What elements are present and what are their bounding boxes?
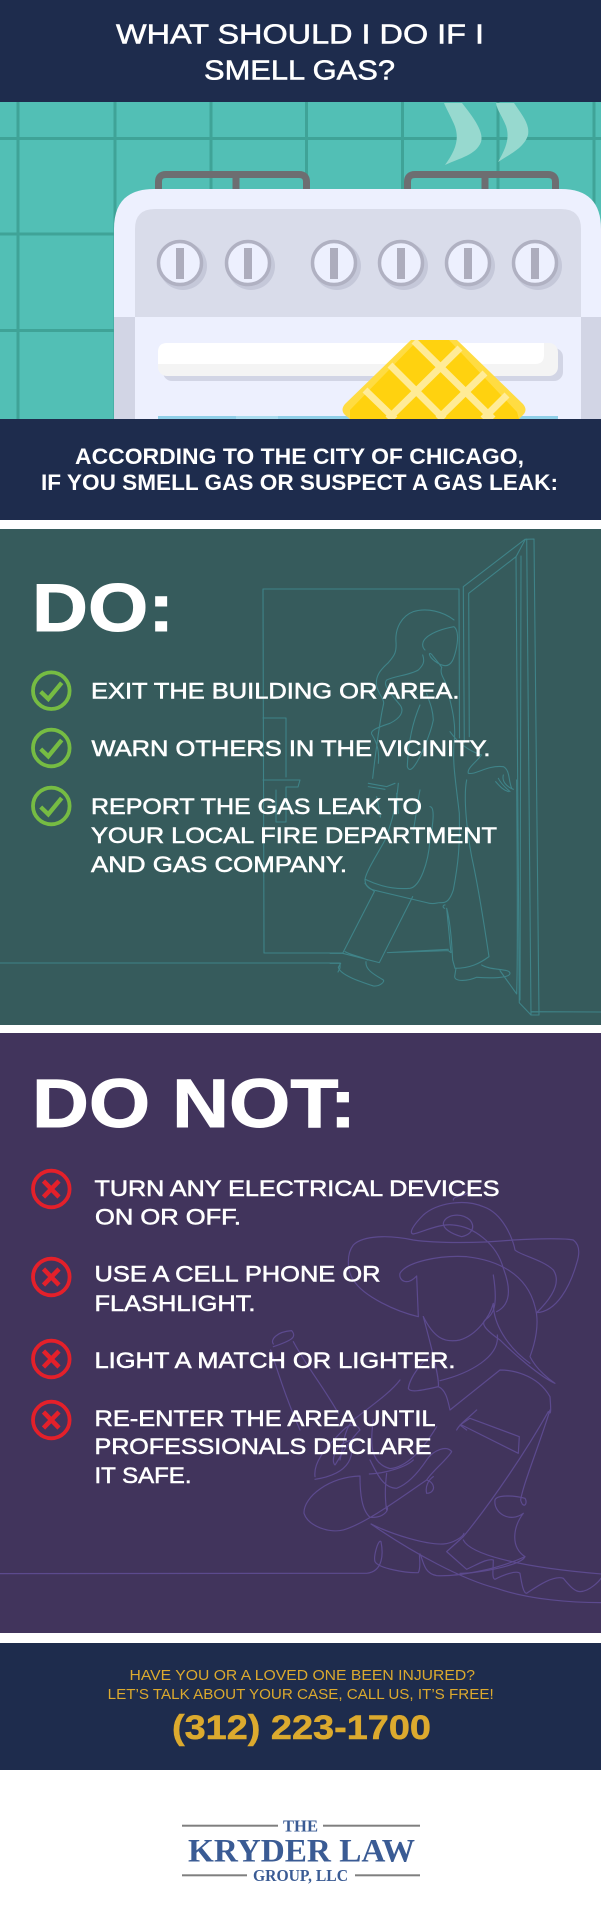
logo: the kryder law group: GROUP, LLC — [253, 1866, 348, 1885]
logo: the kryder law group — [182, 1817, 420, 1885]
item: report the gas leak — [33, 788, 497, 877]
panel: call to action — [0, 1643, 601, 1770]
item: warn others — [33, 730, 490, 766]
call to action text: LET’S TALK ABOUT YOUR CASE, CALL US, IT’S FREE! — [108, 1686, 494, 1703]
item: exit the building — [33, 672, 460, 709]
line art: woman leaving through door — [0, 539, 601, 1015]
icon: x — [33, 1259, 70, 1295]
item: electrical devices: ON OR OFF. — [95, 1204, 241, 1230]
panel: title header — [0, 0, 601, 102]
icon: x — [33, 1171, 70, 1207]
icon: check — [33, 672, 70, 709]
item: report the gas leak: REPORT THE GAS LEAK TO — [91, 794, 422, 819]
item: warn others: WARN OTHERS IN THE VICINITY. — [92, 736, 490, 761]
logo: the kryder law group: KRYDER LAW — [188, 1834, 415, 1870]
item: re-enter: PROFESSIONALS DECLARE — [94, 1434, 431, 1459]
item: electrical devices — [33, 1171, 500, 1230]
panel: do — [0, 529, 601, 1025]
item: report the gas leak: YOUR LOCAL FIRE DEPARTMENT — [91, 823, 497, 848]
icon: check — [33, 788, 70, 824]
panel: stove illustration — [0, 102, 601, 425]
item: re-enter: RE-ENTER THE AREA UNTIL — [94, 1406, 436, 1431]
icon: knobs — [158, 242, 562, 290]
title — [116, 18, 484, 86]
icon: steam — [444, 103, 528, 165]
item: report the gas leak: AND GAS COMPANY. — [91, 852, 347, 877]
subheading text — [41, 444, 558, 495]
item: match or lighter: LIGHT A MATCH OR LIGHTER. — [94, 1348, 456, 1373]
heading: do: DO: — [32, 570, 174, 646]
item: re-enter: IT SAFE. — [94, 1463, 192, 1488]
stove body — [114, 189, 601, 419]
panel: intro subheading — [0, 419, 601, 520]
title: SMELL GAS? — [204, 54, 395, 86]
item: match or lighter — [33, 1341, 456, 1377]
item: cell phone: FLASHLIGHT. — [94, 1291, 256, 1316]
item: re-enter — [33, 1402, 436, 1488]
icon: left burner grate — [158, 174, 306, 190]
subheading text: IF YOU SMELL GAS OR SUSPECT A GAS LEAK: — [41, 470, 558, 495]
item: cell phone: USE A CELL PHONE OR — [94, 1262, 380, 1286]
logo: the kryder law group: THE — [283, 1817, 318, 1836]
line art: man collapsing in hat — [0, 1192, 601, 1603]
subheading text: ACCORDING TO THE CITY OF CHICAGO, — [75, 444, 524, 469]
oven window — [158, 416, 558, 419]
heading: do not: DO NOT: — [32, 1065, 356, 1142]
icon: x — [33, 1341, 70, 1377]
control panel — [135, 209, 581, 317]
item: electrical devices: TURN ANY ELECTRICAL DEVICES — [94, 1176, 500, 1201]
icon: check — [33, 730, 70, 766]
item: cell phone — [33, 1259, 380, 1316]
call to action text: HAVE YOU OR A LOVED ONE BEEN INJURED? — [130, 1667, 475, 1684]
stove side strips — [114, 317, 601, 419]
icon: yellow towel — [342, 340, 526, 419]
call to action text — [108, 1667, 494, 1703]
item: exit the building: EXIT THE BUILDING OR AREA. — [91, 678, 460, 704]
icon: right burner grate — [408, 174, 556, 190]
title: WHAT SHOULD I DO IF I — [116, 18, 484, 50]
oven handle — [158, 343, 563, 381]
phone number: (312) 223-1700 — [172, 1709, 431, 1747]
panel: do not — [0, 1033, 601, 1633]
icon: x — [33, 1402, 70, 1438]
